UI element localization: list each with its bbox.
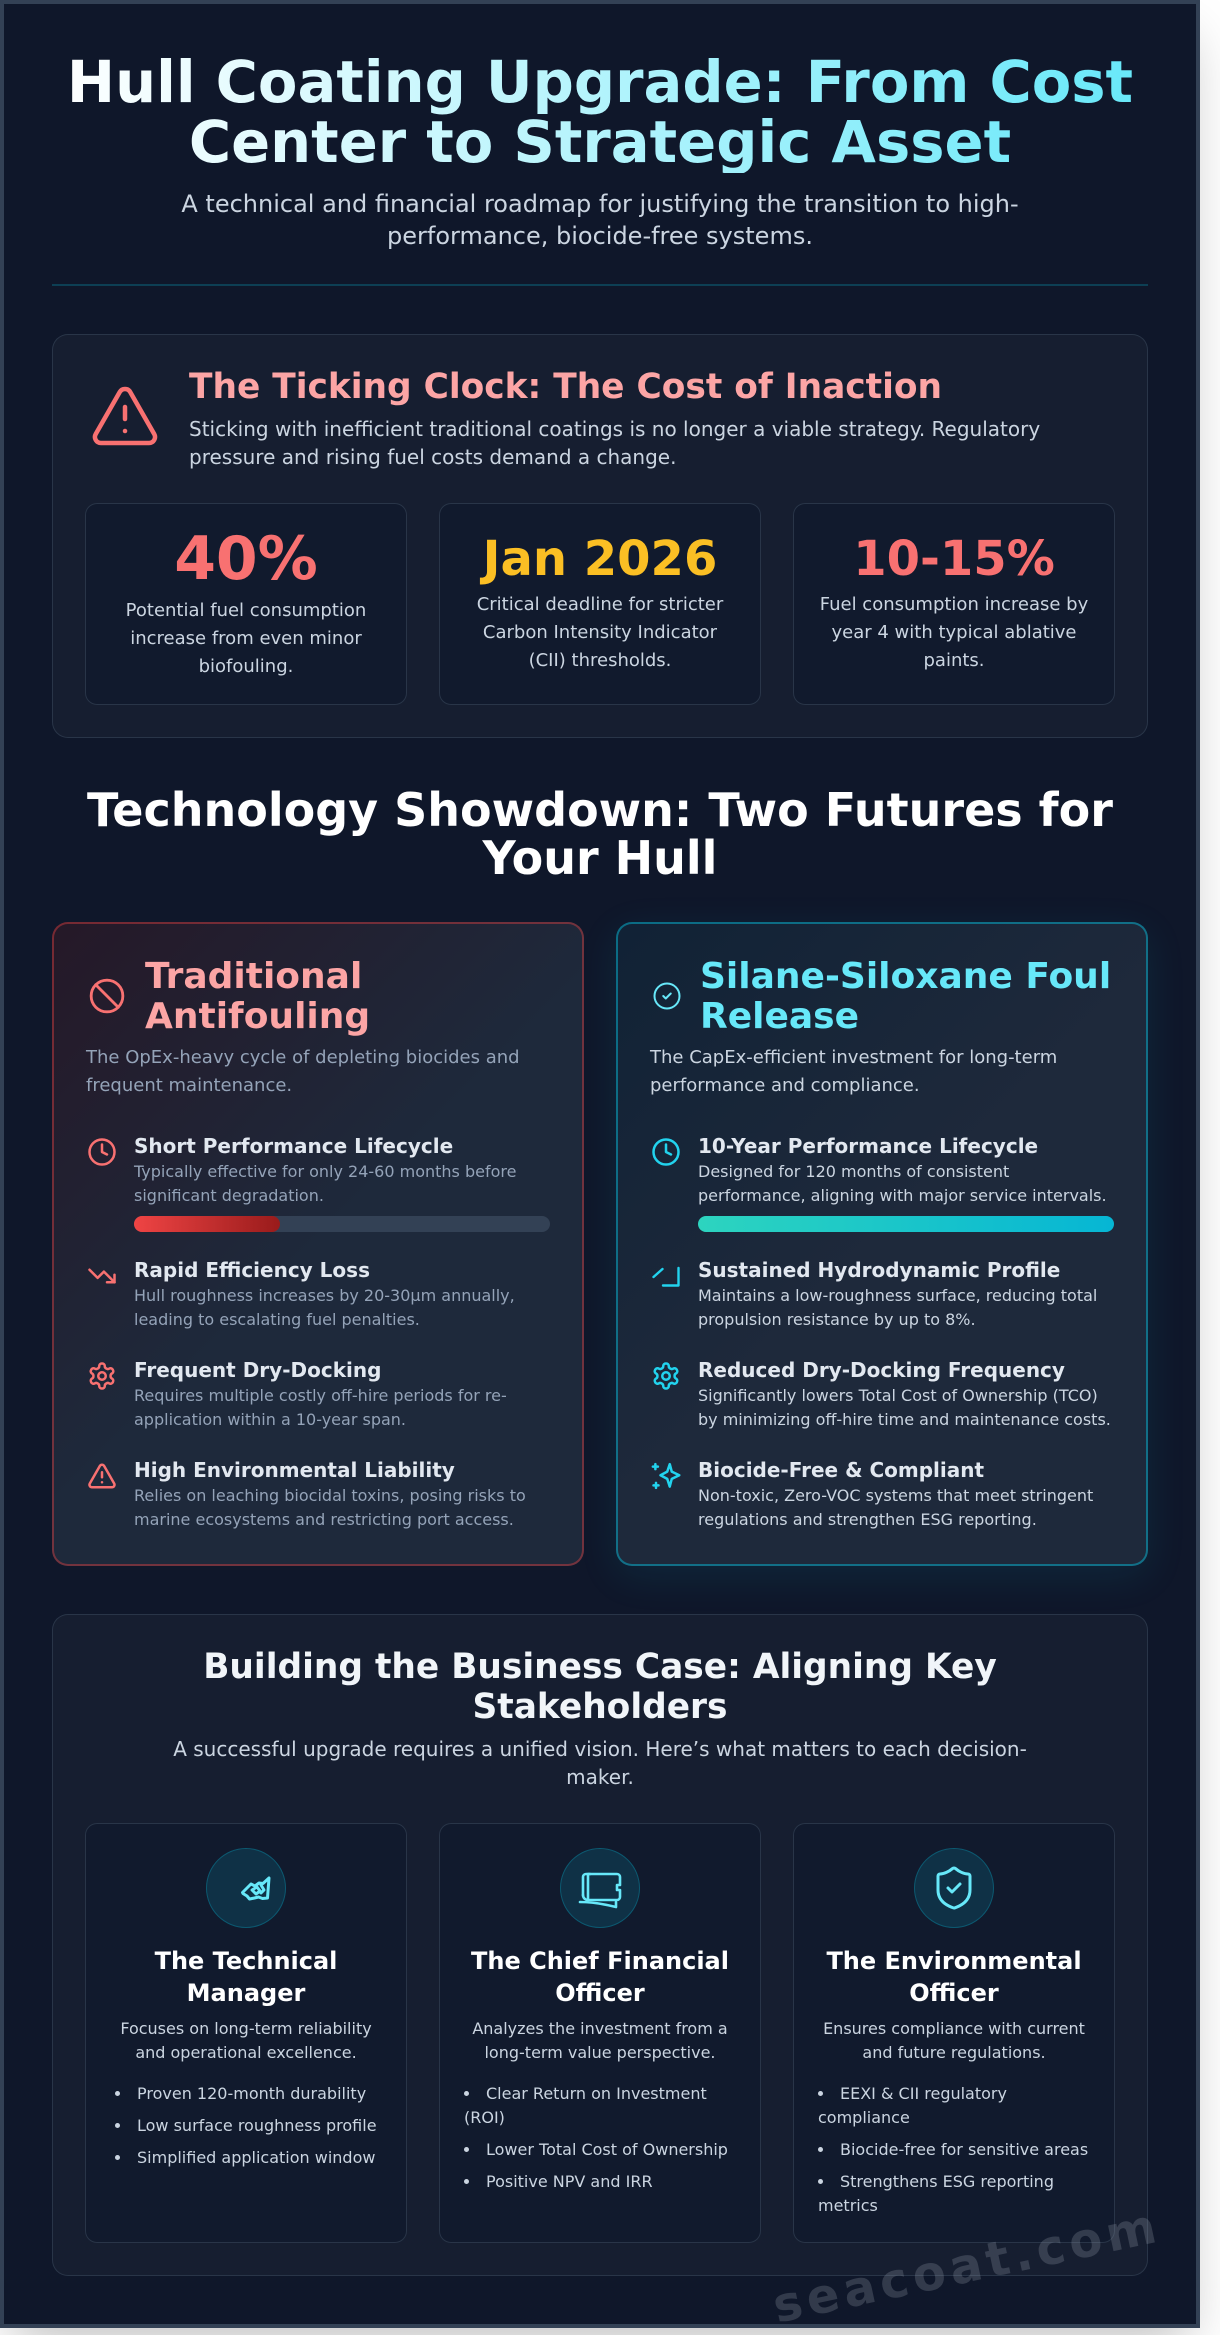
role description xyxy=(823,2019,1085,2062)
role description xyxy=(120,2019,372,2062)
stat value: Jan 2026 xyxy=(483,531,717,587)
stat value: 10-15% xyxy=(853,531,1055,587)
feature title: Rapid Efficiency Loss xyxy=(134,1258,370,1282)
feature text: by minimizing off-hire time and maintenance costs. xyxy=(698,1410,1111,1429)
role description: Ensures compliance with current xyxy=(823,2019,1085,2038)
feature title: Reduced Dry-Docking Frequency xyxy=(698,1358,1065,1382)
feature text: marine ecosystems and restricting port access. xyxy=(134,1510,514,1529)
priorities list: Clear Return on Investment xyxy=(486,2084,707,2103)
heading: Antifouling xyxy=(145,996,370,1037)
panel: business case xyxy=(52,1614,1148,2276)
subtitle xyxy=(181,190,1019,250)
feature text: Significantly lowers Total Cost of Ownership (TCO) xyxy=(698,1386,1098,1405)
priorities list xyxy=(818,2084,1088,2215)
role description xyxy=(472,2019,728,2062)
priorities list: Low surface roughness profile xyxy=(137,2116,377,2135)
heading: Building the Business Case: Aligning Key xyxy=(203,1647,997,1687)
priorities list xyxy=(464,2084,728,2191)
icon: wallet xyxy=(560,1848,640,1928)
feature text: Designed for 120 months of consistent xyxy=(698,1162,1009,1181)
heading: cost of inaction: The Ticking Clock: The Cost of Inaction xyxy=(189,367,942,407)
feature text: performance, aligning with major service intervals. xyxy=(698,1186,1107,1205)
text: summary: The CapEx-efficient investment for long-term xyxy=(650,1047,1057,1068)
progress bar: 100% xyxy=(698,1216,1114,1232)
heading xyxy=(700,956,1111,1037)
icon: warning triangle xyxy=(92,386,158,446)
heading: Release xyxy=(700,996,859,1037)
stat card: 10-15% xyxy=(793,503,1115,705)
role description: Focuses on long-term reliability xyxy=(120,2019,372,2038)
stat description: Potential fuel consumption xyxy=(126,600,366,621)
heading: Stakeholders xyxy=(473,1687,727,1727)
feature title: Short Performance Lifecycle xyxy=(134,1134,453,1158)
heading: technology showdown xyxy=(87,783,1113,885)
stat description: Fuel consumption increase by xyxy=(820,594,1088,615)
panel: traditional antifouling xyxy=(52,922,584,1566)
feature text: application within a 10-year span. xyxy=(134,1410,406,1429)
feature title: Sustained Hydrodynamic Profile xyxy=(698,1258,1060,1282)
card: environmental officer xyxy=(793,1823,1115,2243)
icon: ban xyxy=(90,978,124,1014)
priorities list: EEXI & CII regulatory xyxy=(840,2084,1007,2103)
feature title: High Environmental Liability xyxy=(134,1458,455,1482)
icon: gear xyxy=(89,1362,115,1390)
icon: clock xyxy=(88,1138,116,1166)
text: intro: maker. xyxy=(566,1765,634,1789)
heading: technology showdown: Technology Showdown: Two Futures for xyxy=(87,783,1113,837)
stat description xyxy=(477,594,724,671)
feature text xyxy=(698,1286,1097,1329)
stat card: Jan 2026 xyxy=(439,503,761,705)
feature text xyxy=(698,1162,1107,1205)
text: intro: Sticking with inefficient traditional coatings is no longer a viable strategy. Regulatory xyxy=(189,417,1040,441)
icon: shield check xyxy=(914,1848,994,1928)
feature text xyxy=(698,1386,1111,1429)
feature text: Typically effective for only 24-60 months before xyxy=(134,1162,516,1181)
feature text: Relies on leaching biocidal toxins, posing risks to xyxy=(134,1486,526,1505)
icon: sparkles xyxy=(652,1462,680,1490)
priorities list: metrics xyxy=(818,2196,878,2215)
subtitle: performance, biocide-free systems. xyxy=(387,222,813,250)
role description: Analyzes the investment from a xyxy=(472,2019,728,2038)
role title xyxy=(826,1947,1082,2007)
priorities list: compliance xyxy=(818,2108,910,2127)
feature title: Biocide-Free & Compliant xyxy=(698,1458,984,1482)
text: summary: The OpEx-heavy cycle of depleting biocides and xyxy=(86,1047,520,1068)
text: intro xyxy=(189,417,1040,469)
priorities list: Proven 120-month durability xyxy=(137,2084,366,2103)
feature text: leading to escalating fuel penalties. xyxy=(134,1310,420,1329)
subtitle: A technical and financial roadmap for justifying the transition to high- xyxy=(181,190,1019,218)
feature text: significant degradation. xyxy=(134,1186,324,1205)
role title: The Environmental xyxy=(826,1947,1082,1975)
stat description: Critical deadline for stricter xyxy=(477,594,723,615)
card: technical manager xyxy=(85,1823,407,2243)
role description: long-term value perspective. xyxy=(484,2043,716,2062)
role description: and future regulations. xyxy=(862,2043,1046,2062)
stat description: (CII) thresholds. xyxy=(529,650,671,671)
role title: The Technical xyxy=(155,1947,337,1975)
feature title: 10-Year Performance Lifecycle xyxy=(698,1134,1038,1158)
heading: Silane-Siloxane Foul xyxy=(700,956,1111,997)
text: intro xyxy=(173,1737,1027,1789)
card: chief financial officer xyxy=(439,1823,761,2243)
feature title: Frequent Dry-Docking xyxy=(134,1358,381,1382)
icon: trending down xyxy=(88,1268,116,1284)
text: summary: frequent maintenance. xyxy=(86,1075,292,1096)
feature text: regulations and strengthen ESG reporting. xyxy=(698,1510,1037,1529)
role title xyxy=(471,1947,729,2007)
stat description xyxy=(126,600,366,677)
text: summary: performance and compliance. xyxy=(650,1075,920,1096)
icon: warning triangle small xyxy=(88,1464,116,1488)
role title: Officer xyxy=(909,1979,999,2007)
progress bar: 35% xyxy=(134,1216,550,1232)
role title xyxy=(154,1947,337,2007)
heading xyxy=(145,956,370,1037)
text: intro: pressure and rising fuel costs demand a change. xyxy=(189,445,676,469)
feature text xyxy=(134,1486,526,1529)
text: intro: A successful upgrade requires a unified vision. Here’s what matters to each decision- xyxy=(173,1737,1027,1761)
icon: clock xyxy=(652,1138,680,1166)
priorities list: Lower Total Cost of Ownership xyxy=(486,2140,728,2159)
stat card: 40% xyxy=(85,503,407,705)
stat description: year 4 with typical ablative xyxy=(831,622,1077,643)
feature text xyxy=(698,1486,1093,1529)
stat description: Carbon Intensity Indicator xyxy=(483,622,717,643)
feature text xyxy=(134,1386,507,1429)
priorities list: Biocide-free for sensitive areas xyxy=(840,2140,1088,2159)
title: Center to Strategic Asset xyxy=(189,109,1011,176)
role title: Officer xyxy=(555,1979,645,2007)
priorities list: Simplified application window xyxy=(137,2148,375,2167)
priorities list: Positive NPV and IRR xyxy=(486,2172,653,2191)
title xyxy=(52,53,1148,173)
feature text xyxy=(134,1286,515,1329)
icon: hydrodynamic profile xyxy=(652,1266,680,1287)
stat description: increase from even minor xyxy=(130,628,362,649)
priorities list: Strengthens ESG reporting xyxy=(840,2172,1054,2191)
feature text xyxy=(134,1162,516,1205)
stat value: 40% xyxy=(174,524,318,594)
feature text: Maintains a low-roughness surface, reducing total xyxy=(698,1286,1097,1305)
stat description xyxy=(820,594,1088,671)
feature text: Requires multiple costly off-hire periods for re- xyxy=(134,1386,507,1405)
stat description: paints. xyxy=(923,650,985,671)
priorities list: (ROI) xyxy=(464,2108,505,2127)
icon: tools xyxy=(206,1848,286,1928)
feature text: propulsion resistance by up to 8%. xyxy=(698,1310,976,1329)
feature text: Non-toxic, Zero-VOC systems that meet stringent xyxy=(698,1486,1093,1505)
feature text: Hull roughness increases by 20-30µm annually, xyxy=(134,1286,515,1305)
role title: The Chief Financial xyxy=(471,1947,729,1975)
heading xyxy=(203,1647,997,1727)
priorities list xyxy=(115,2084,377,2167)
icon: gear xyxy=(653,1362,679,1390)
text: summary xyxy=(650,1047,1057,1096)
stat description: biofouling. xyxy=(199,656,293,677)
role title: Manager xyxy=(187,1979,305,2007)
heading: Traditional xyxy=(145,956,362,997)
role description: and operational excellence. xyxy=(135,2043,357,2062)
panel: the ticking clock xyxy=(52,334,1148,738)
icon: check circle xyxy=(654,982,680,1010)
text: summary xyxy=(86,1047,520,1096)
title: Hull Coating Upgrade: From Cost xyxy=(67,49,1133,116)
panel: silane-siloxane foul release xyxy=(616,922,1148,1566)
heading: technology showdown: Your Hull xyxy=(483,831,717,885)
